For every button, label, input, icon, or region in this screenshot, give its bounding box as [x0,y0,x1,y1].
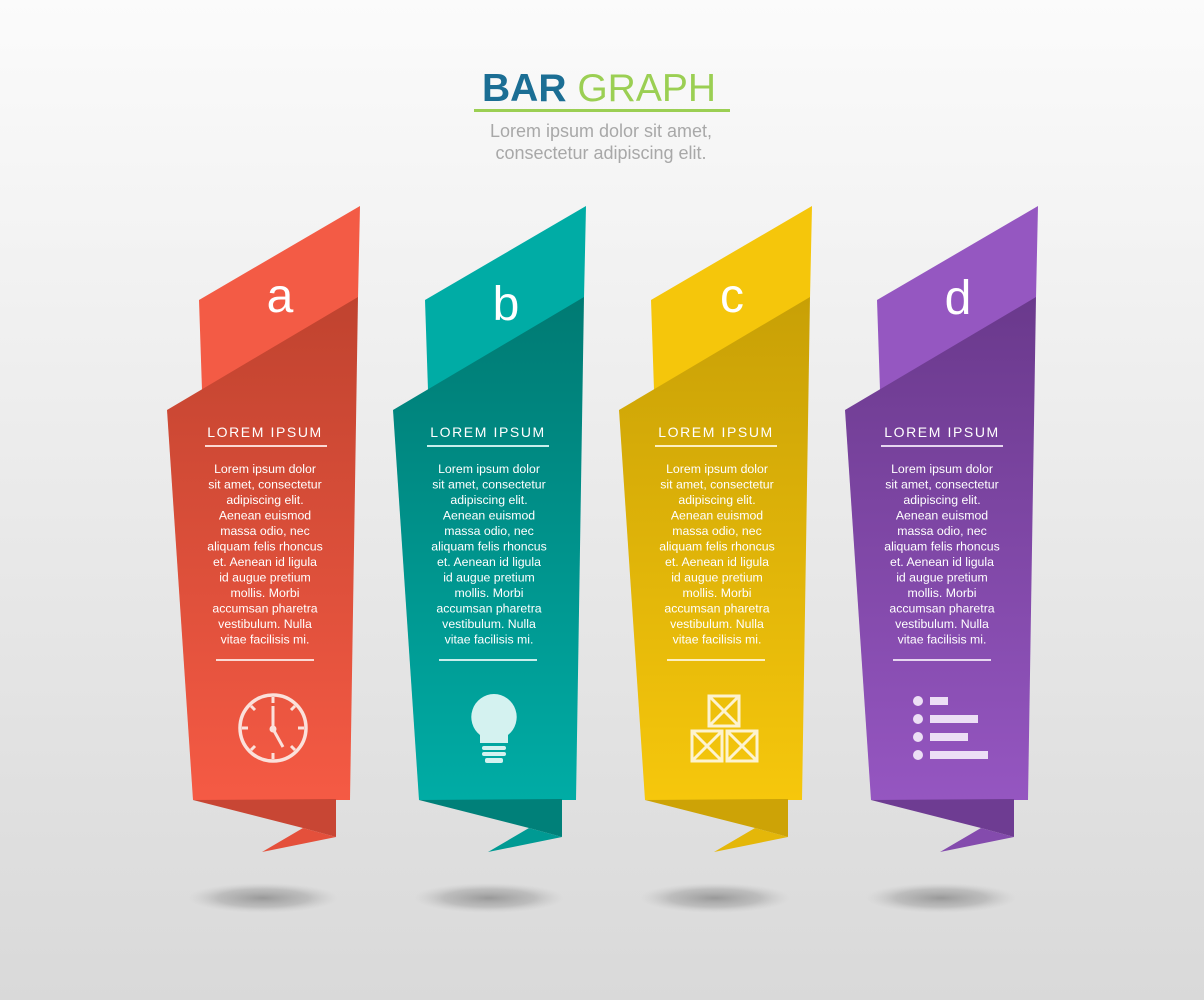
text b: vestibulum. Nulla [442,617,536,631]
icon: boxes [692,696,757,761]
text d: Lorem ipsum dolor [891,462,993,476]
icon: list [913,696,988,760]
text c: Lorem ipsum dolor [666,462,768,476]
text b: adipiscing elit. [450,493,528,507]
text b: sit amet, consectetur [432,478,546,492]
text c [659,462,775,646]
text c: Aenean euismod [671,508,763,522]
heading a: LOREM IPSUM [207,424,323,440]
text a: id augue pretium [219,570,311,584]
text d: massa odio, nec [897,524,987,538]
heading c: LOREM IPSUM [658,424,774,440]
heading c [655,424,777,447]
text d: vestibulum. Nulla [895,617,989,631]
text a: massa odio, nec [220,524,310,538]
panel: d [845,206,1038,913]
text d: aliquam felis rhoncus [884,540,1000,554]
letter c: c [720,270,744,323]
text a: vestibulum. Nulla [218,617,312,631]
letter d: d [945,272,971,325]
subtitle [490,121,712,163]
text c: accumsan pharetra [664,602,770,616]
text b: id augue pretium [443,570,535,584]
text c: sit amet, consectetur [660,478,774,492]
heading a [205,424,327,447]
heading d: LOREM IPSUM [884,424,1000,440]
icon: clock [240,695,306,761]
text d: Aenean euismod [896,508,988,522]
text c: id augue pretium [671,570,763,584]
text b: aliquam felis rhoncus [431,540,547,554]
text d: mollis. Morbi [907,586,977,600]
text d [884,462,1000,646]
text c: et. Aenean id ligula [665,555,769,569]
letter a: a [267,270,294,323]
panel: c [619,206,812,913]
text c: mollis. Morbi [682,586,752,600]
icon: bulb [471,694,517,763]
text d: sit amet, consectetur [885,478,999,492]
panel: b [393,206,586,913]
subtitle: consectetur adipiscing elit. [495,143,707,163]
text b: Lorem ipsum dolor [438,462,540,476]
heading b: LOREM IPSUM [430,424,546,440]
text d: adipiscing elit. [903,493,981,507]
text d: id augue pretium [896,570,988,584]
text c: vitae facilisis mi. [673,632,761,646]
text b: vitae facilisis mi. [445,632,533,646]
heading d [881,424,1003,447]
text c: adipiscing elit. [678,493,756,507]
text a: aliquam felis rhoncus [207,540,323,554]
text b: Aenean euismod [443,508,535,522]
text a: adipiscing elit. [226,493,304,507]
text c: massa odio, nec [672,524,762,538]
text b: et. Aenean id ligula [437,555,541,569]
text c: aliquam felis rhoncus [659,540,775,554]
text a: accumsan pharetra [212,602,318,616]
text b: massa odio, nec [444,524,534,538]
text b: mollis. Morbi [454,586,524,600]
text a: Aenean euismod [219,508,311,522]
text b: accumsan pharetra [436,602,542,616]
text a: sit amet, consectetur [208,478,322,492]
text d: vitae facilisis mi. [898,632,986,646]
letter b: b [493,278,519,331]
text c: vestibulum. Nulla [670,617,764,631]
text a: Lorem ipsum dolor [214,462,316,476]
text d: accumsan pharetra [889,602,995,616]
text a: mollis. Morbi [230,586,300,600]
text a: vitae facilisis mi. [221,632,309,646]
text b [431,462,547,646]
text a: et. Aenean id ligula [213,555,317,569]
subtitle: Lorem ipsum dolor sit amet, [490,121,712,141]
heading b [427,424,549,447]
title: BAR GRAPH [482,67,716,110]
panel: a [167,206,360,913]
text d: et. Aenean id ligula [890,555,994,569]
text a [207,462,323,646]
